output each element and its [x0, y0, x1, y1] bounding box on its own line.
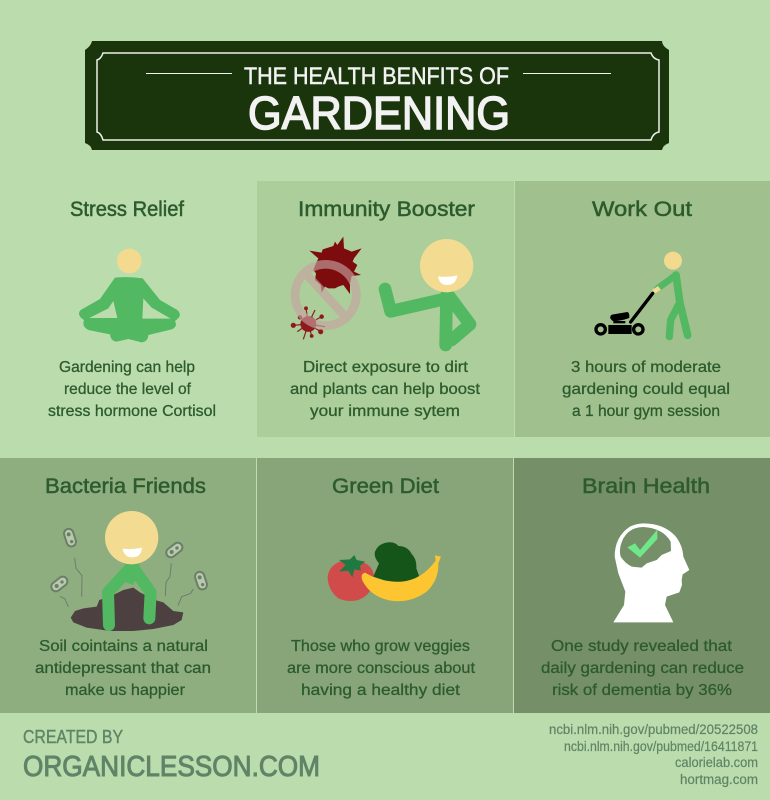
- footer sources: ncbi.nlm.nih.gov/pubmed/20522508: [549, 722, 758, 737]
- heading: brain health: Brain Health: [582, 475, 710, 498]
- description: green diet: [287, 638, 476, 699]
- lawn mower: [596, 293, 653, 334]
- footer sources: [549, 722, 758, 787]
- description: green diet: are more conscious about: [287, 660, 476, 677]
- footer credit: [23, 727, 320, 783]
- icon: meditating person: [79, 249, 180, 342]
- footer sources: hortmag.com: [680, 772, 758, 787]
- head: [105, 511, 158, 564]
- soil mound: [71, 588, 183, 631]
- splat germ: [309, 237, 362, 294]
- checkmark: [627, 530, 657, 558]
- title line 2: GARDENING: [248, 87, 510, 139]
- banana: [362, 555, 441, 601]
- description: work out: gardening could equal: [562, 381, 730, 398]
- heading: immunity booster: Immunity Booster: [298, 198, 475, 221]
- description: bacteria friends: Soil cointains a natural: [39, 638, 208, 655]
- heading: bacteria friends: Bacteria Friends: [45, 475, 206, 498]
- description: work out: 3 hours of moderate: [571, 359, 721, 376]
- description: stress relief: stress hormone Cortisol: [48, 403, 216, 420]
- small virus: [291, 307, 325, 339]
- icon: person mowing lawn: [596, 252, 688, 337]
- description: green diet: having a healthy diet: [301, 682, 461, 699]
- title line 1: THE HEALTH BENFITS OF: [244, 63, 509, 90]
- description: bacteria friends: antidepressant that can: [35, 660, 211, 677]
- panel: stress relief: [0, 181, 257, 437]
- description: brain health: daily gardening can reduce: [541, 660, 744, 677]
- person: [108, 569, 151, 625]
- tomato stem: [339, 555, 365, 577]
- description: work out: [562, 359, 730, 420]
- bacteria and squiggles: [49, 528, 208, 607]
- description: stress relief: reduce the level of: [64, 381, 192, 398]
- icon: tomato, broccoli and banana: [328, 542, 441, 601]
- description: bacteria friends: make us happier: [65, 682, 186, 699]
- heading: green diet: Green Diet: [332, 475, 439, 498]
- panel: bacteria friends: [0, 458, 256, 713]
- description: brain health: [541, 638, 744, 699]
- icon: head with checkmark: [613, 523, 689, 622]
- heading: stress relief: Stress Relief: [70, 198, 184, 221]
- description: immunity booster: your immune sytem: [310, 403, 460, 420]
- broccoli: [373, 542, 420, 585]
- description: green diet: Those who grow veggies: [291, 638, 470, 655]
- description: immunity booster: [290, 359, 481, 420]
- panel: immunity booster: [257, 181, 514, 437]
- description: immunity booster: Direct exposure to dirt: [303, 359, 469, 376]
- icon: germs and person: [291, 237, 473, 345]
- description: bacteria friends: [35, 638, 211, 699]
- smile: [123, 548, 142, 557]
- footer credit: CREATED BY: [23, 727, 123, 747]
- smile: [438, 275, 457, 285]
- description: brain health: One study revealed that: [551, 638, 733, 655]
- person: [385, 289, 470, 345]
- title plaque: [85, 41, 669, 150]
- icon: person in soil with bacteria: [49, 511, 208, 631]
- description: work out: a 1 hour gym session: [572, 403, 720, 420]
- description: immunity booster: and plants can help boost: [290, 381, 481, 398]
- tomato: [328, 560, 374, 601]
- description: brain health: risk of dementia by 36%: [552, 682, 732, 699]
- panel: brain health: [514, 458, 770, 713]
- footer credit: ORGANICLESSON.COM: [23, 751, 320, 783]
- prohibition sign: [295, 264, 356, 326]
- panel: green diet: [257, 458, 513, 713]
- description: stress relief: Gardening can help: [59, 359, 195, 376]
- footer sources: calorielab.com: [675, 755, 758, 770]
- heading: work out: Work Out: [592, 198, 692, 221]
- panel: work out: [515, 181, 770, 437]
- head: [420, 239, 473, 292]
- description: stress relief: [48, 359, 216, 420]
